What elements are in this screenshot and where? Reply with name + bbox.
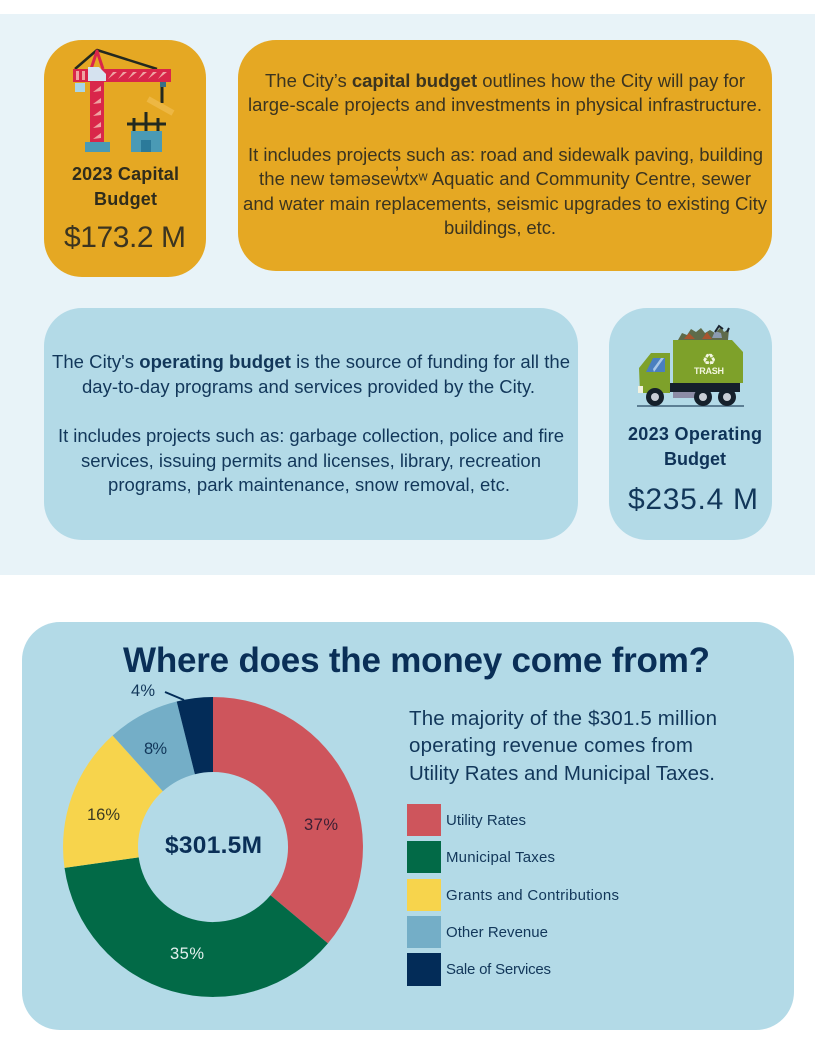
text block: operating budget definition: The City's operating budget is the source of funding for all the xyxy=(52,351,570,372)
icon: garbage truck: TRASH xyxy=(694,366,724,376)
data label: sale of services 4%: 4% xyxy=(131,682,155,700)
text block: operating service examples xyxy=(58,425,564,495)
heading: 2023 operating budget xyxy=(628,424,762,469)
panel: operating budget amount xyxy=(609,308,772,540)
legend item: other revenue xyxy=(407,916,548,948)
icon: garbage truck xyxy=(637,326,744,407)
legend xyxy=(407,804,619,986)
data label: other revenue 8%: 8% xyxy=(144,740,167,758)
panel: operating budget description xyxy=(44,308,578,540)
legend item: grants and contributions xyxy=(407,879,619,911)
text block: operating budget definition xyxy=(52,351,570,397)
data label: utility rates 37%: 37% xyxy=(304,816,338,834)
amount: operating budget: $235.4 M xyxy=(628,483,758,516)
donut centre total: $301.5M xyxy=(165,832,262,859)
text block: revenue summary xyxy=(409,707,717,785)
legend item: utility rates: Utility Rates xyxy=(446,812,526,829)
leader line for 4% xyxy=(165,692,184,700)
text block: operating service examples: programs, park maintenance, snow removal, etc. xyxy=(108,474,510,495)
data label: municipal taxes 35%: 35% xyxy=(170,945,204,963)
heading: 2023 operating budget: Budget xyxy=(664,449,726,469)
panel: capital budget amount xyxy=(44,40,206,277)
title: Where does the money come from? xyxy=(123,641,710,680)
text block: capital budget definition xyxy=(248,70,762,115)
text block: capital project examples: It includes projects such as: road and sidewalk paving, building xyxy=(248,144,763,165)
text block: capital project examples: buildings, etc. xyxy=(444,217,556,238)
text block: revenue summary: operating revenue comes from xyxy=(409,734,693,757)
text block: revenue summary: The majority of the $301.5 million xyxy=(409,707,717,730)
text block: capital project examples: the new təməsew̓txʷ Aquatic and Community Centre, sewer xyxy=(259,167,751,189)
heading: 2023 operating budget: 2023 Operating xyxy=(628,424,762,444)
legend item: sale of services xyxy=(407,953,551,986)
text block: revenue summary: Utility Rates and Municipal Taxes. xyxy=(409,762,715,785)
legend item: municipal taxes xyxy=(407,841,555,873)
icon: construction crane xyxy=(73,50,173,152)
text block: capital project examples xyxy=(243,144,768,238)
heading: 2023 capital budget: 2023 Capital xyxy=(72,164,179,184)
panel: capital budget description xyxy=(238,40,772,271)
text block: capital budget definition: The City’s capital budget outlines how the City will pay for xyxy=(265,70,745,91)
heading: 2023 capital budget xyxy=(72,164,179,209)
donut chart: operating revenue xyxy=(63,682,363,997)
legend item: grants and contributions: Grants and Contributions xyxy=(446,887,619,904)
text block: operating service examples: It includes projects such as: garbage collection, police and fire xyxy=(58,425,564,446)
amount: capital budget: $173.2 M xyxy=(64,221,186,254)
heading: 2023 capital budget: Budget xyxy=(94,189,157,209)
legend item: other revenue: Other Revenue xyxy=(446,924,548,941)
legend item: municipal taxes: Municipal Taxes xyxy=(446,849,555,866)
icon: garbage truck: ♻ xyxy=(702,350,716,369)
text block: operating budget definition: day-to-day programs and services provided by the City. xyxy=(82,376,535,397)
panel: revenue sources xyxy=(22,622,794,1030)
text block: capital budget definition: large-scale projects and investments in physical infrastructure. xyxy=(248,94,762,115)
data label: grants 16%: 16% xyxy=(87,806,120,824)
legend item: utility rates xyxy=(407,804,526,836)
text block: capital project examples: and water main replacements, seismic upgrades to existing City xyxy=(243,193,768,214)
top background band xyxy=(0,14,815,575)
text block: operating service examples: services, issuing permits and licenses, library, recreation xyxy=(81,450,541,471)
legend item: sale of services: Sale of Services xyxy=(446,961,551,978)
